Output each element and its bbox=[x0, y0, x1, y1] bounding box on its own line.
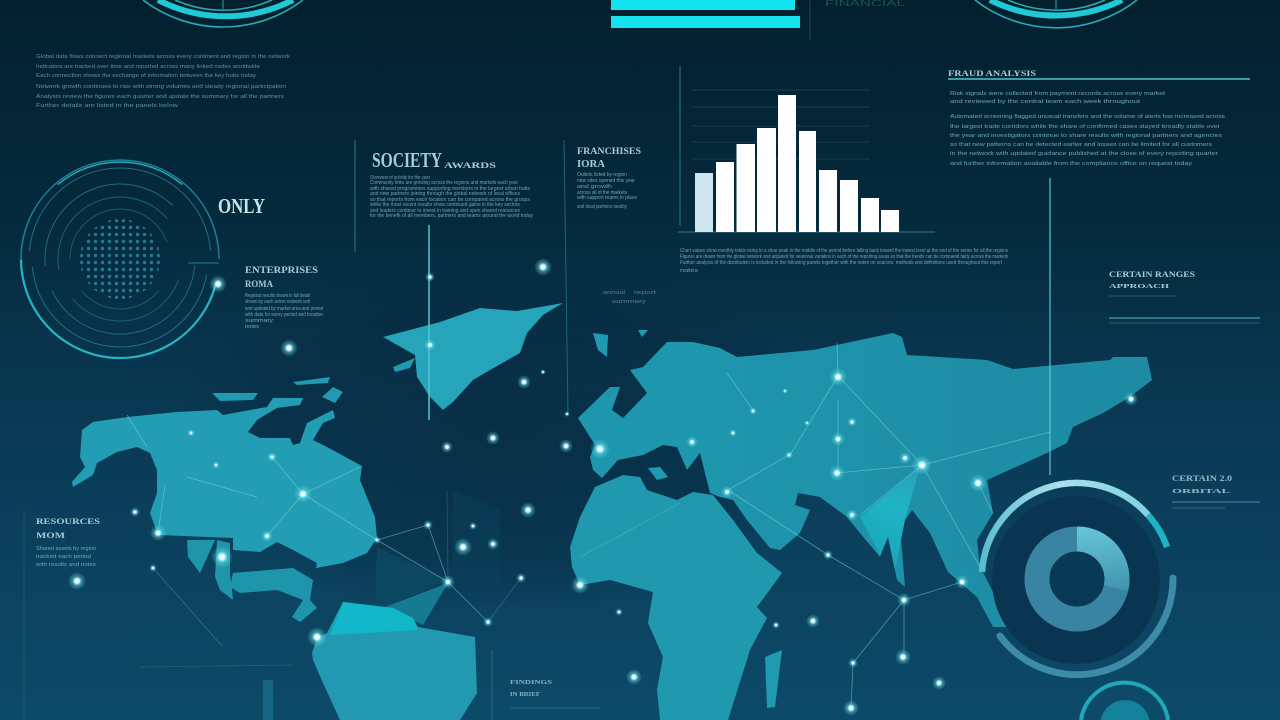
label: enterprises: notes bbox=[245, 324, 260, 330]
Africa bbox=[570, 475, 782, 720]
text block: bottom center: FINDINGS bbox=[510, 679, 552, 686]
text block: right lower: CERTAIN 2.0 bbox=[1172, 474, 1232, 483]
chart caption: Figures are drawn from the global network and adjusted for seasonal variation in each of the reporting areas so that the trends can be compared fairly across the markets bbox=[680, 254, 1008, 260]
text block: franchises: new sites opened this year bbox=[577, 178, 635, 184]
text block: franchises: with support teams in place bbox=[577, 195, 637, 201]
label: enterprises: ROMA bbox=[245, 279, 273, 289]
text block: mid labels bbox=[603, 290, 657, 305]
top left text block: Further details are listed in the panels below bbox=[36, 103, 179, 109]
text block: fraud analysis: Risk signals were collected from payment records across every market bbox=[950, 91, 1166, 97]
text block: bottom left bbox=[36, 516, 100, 568]
text block: right lower bbox=[1172, 474, 1260, 508]
label: enterprises: shown by each active network unit bbox=[245, 299, 311, 305]
text block: franchises: Outlets listed by region bbox=[577, 172, 627, 178]
text block: bottom left: MOM bbox=[36, 530, 65, 540]
top left text block: Analysts review the figures each quarter and update the summary for all the partners bbox=[36, 94, 285, 100]
text block: right lower: ORBITAL bbox=[1172, 488, 1231, 495]
bottom gauge bbox=[1081, 683, 1168, 720]
top left text block: Global data flows connect regional markets across every continent and region in the network bbox=[36, 54, 291, 60]
text block: society bbox=[370, 148, 533, 219]
Arctic islands bbox=[212, 330, 648, 403]
text block: society: while the most recent results show continued gains in the key sectors bbox=[370, 202, 520, 208]
bars bbox=[695, 173, 713, 232]
network lines bbox=[127, 343, 1050, 708]
label: enterprises bbox=[245, 265, 323, 330]
text block: fraud analysis: in the network with updated guidance published at the close of every reporting quarter bbox=[950, 151, 1218, 157]
text block: fraud analysis: Automated screening flagged unusual transfers and the volume of alerts has increased across bbox=[950, 114, 1226, 120]
world map bbox=[72, 303, 1152, 720]
India highlight bbox=[860, 467, 920, 570]
text block: fraud analysis: and reviewed by the central team each week throughout bbox=[950, 99, 1141, 105]
text block: fraud analysis: the year and investigators continue to share results with regional partners and agencies bbox=[950, 133, 1223, 139]
text block: franchises: and growth bbox=[577, 184, 612, 190]
North America bbox=[72, 398, 377, 568]
label: enterprises: and updated by market area and period bbox=[245, 306, 323, 312]
bar chart bbox=[678, 66, 935, 232]
text block: mid labels: annual bbox=[603, 290, 625, 296]
text block: bottom left: tracked each period bbox=[36, 554, 91, 560]
label: enterprises: summary bbox=[245, 318, 274, 324]
text block: certain ranges: APPROACH bbox=[1109, 283, 1169, 290]
text block: bottom left: with results and notes bbox=[36, 562, 97, 568]
text block: society: for the benefit of all members, partners and teams around the world today bbox=[370, 213, 533, 219]
top left text block: Each connection shows the exchange of information between the key hubs today bbox=[36, 73, 257, 79]
text block: society: with shared programmes supporting members in the largest urban hubs bbox=[370, 186, 530, 192]
text block: bottom left: RESOURCES bbox=[36, 516, 100, 526]
text block: society: Overview of activity for the year bbox=[370, 175, 430, 181]
text block: society: and new partners joining through the global network of local offices bbox=[370, 191, 521, 197]
text block: franchises: across all of the markets bbox=[577, 190, 627, 196]
dotted globe bbox=[80, 219, 160, 299]
text block: franchises: FRANCHISES bbox=[577, 146, 641, 156]
outer top arc bbox=[982, 483, 1148, 572]
short vertical bar bbox=[263, 680, 273, 720]
glowing nodes bbox=[68, 258, 1138, 716]
donut panel bbox=[982, 483, 1173, 675]
Eurasia bbox=[578, 333, 1152, 627]
chart caption: Chart values show monthly totals rising to a clear peak in the middle of the period before falling back toward the lowest level at the end of the series for all the regions bbox=[680, 248, 1008, 254]
text block: bottom center: IN BRIEF bbox=[510, 691, 540, 698]
label: enterprises: with data for every period and location bbox=[245, 312, 323, 318]
text block: fraud analysis: and further information available from the compliance office on request today bbox=[950, 161, 1193, 167]
Madagascar bbox=[765, 650, 782, 708]
top faint label bbox=[810, 0, 906, 40]
outer bottom arc bbox=[1000, 578, 1173, 675]
top cyan bars bbox=[611, 0, 800, 28]
text block: fraud analysis bbox=[948, 69, 1250, 167]
text block: society: Community links are growing across the regions and markets each year bbox=[370, 180, 518, 186]
top left text block: Indicators are tracked over time and reported across many linked nodes worldwide bbox=[36, 64, 260, 70]
chart caption: Further analysis of the distribution is included in the following panels together with the notes on sources, methods and definitions used throughout this report bbox=[680, 260, 1003, 266]
top left text block: Network growth continues to rise with strong volumes and steady regional participation bbox=[36, 84, 286, 90]
vertical leader lines bbox=[24, 140, 1050, 720]
top left text block bbox=[36, 54, 291, 109]
text block: certain ranges: CERTAIN RANGES bbox=[1109, 270, 1196, 279]
text block: bottom left: Shared assets by region bbox=[36, 546, 96, 552]
chart caption: notes bbox=[680, 268, 699, 274]
top decorative circle right bbox=[975, 0, 1137, 28]
dark disc bbox=[992, 496, 1160, 664]
text block: mid labels: report bbox=[634, 290, 657, 296]
text block: franchises: IORA bbox=[577, 159, 606, 170]
text block: society: so that reports from each location can be compared across the groups bbox=[370, 197, 531, 203]
label: only: ONLY bbox=[218, 194, 265, 218]
text block: franchises: and local partners nearby bbox=[577, 204, 627, 210]
South America bbox=[312, 602, 477, 720]
text block: society: AWARDS bbox=[444, 161, 497, 170]
ocean shading bbox=[160, 240, 840, 620]
Central America bbox=[187, 540, 317, 622]
label: enterprises: ENTERPRISES bbox=[245, 265, 318, 275]
Greenland bbox=[383, 303, 563, 410]
atlantic facets bbox=[375, 490, 500, 625]
text block: certain ranges bbox=[1109, 270, 1260, 323]
text block: society: and leaders continue to invest in training and open shared resources bbox=[370, 208, 520, 214]
text block: fraud analysis: the largest trade corridors while the share of confirmed cases stayed broadly stable over bbox=[950, 124, 1220, 130]
node: HUD bbox=[209, 275, 227, 293]
Mediterranean island bbox=[648, 467, 668, 480]
donut ring bbox=[1037, 539, 1117, 619]
text block: franchises bbox=[577, 146, 641, 210]
radial HUD sphere bbox=[0, 122, 257, 396]
axis and grid bbox=[678, 66, 935, 232]
text block: bottom center bbox=[510, 679, 600, 708]
text block: fraud analysis: so that new patterns can be detected earlier and losses can be limited for all customers bbox=[950, 142, 1213, 148]
label: enterprises: Regional results shown in full detail bbox=[245, 293, 310, 299]
text block: fraud analysis: FRAUD ANALYSIS bbox=[948, 69, 1037, 78]
top decorative circle left bbox=[143, 0, 303, 27]
text block: mid labels: summary bbox=[612, 299, 647, 305]
chart caption bbox=[680, 248, 1008, 274]
text block: society: SOCIETY bbox=[372, 148, 442, 172]
